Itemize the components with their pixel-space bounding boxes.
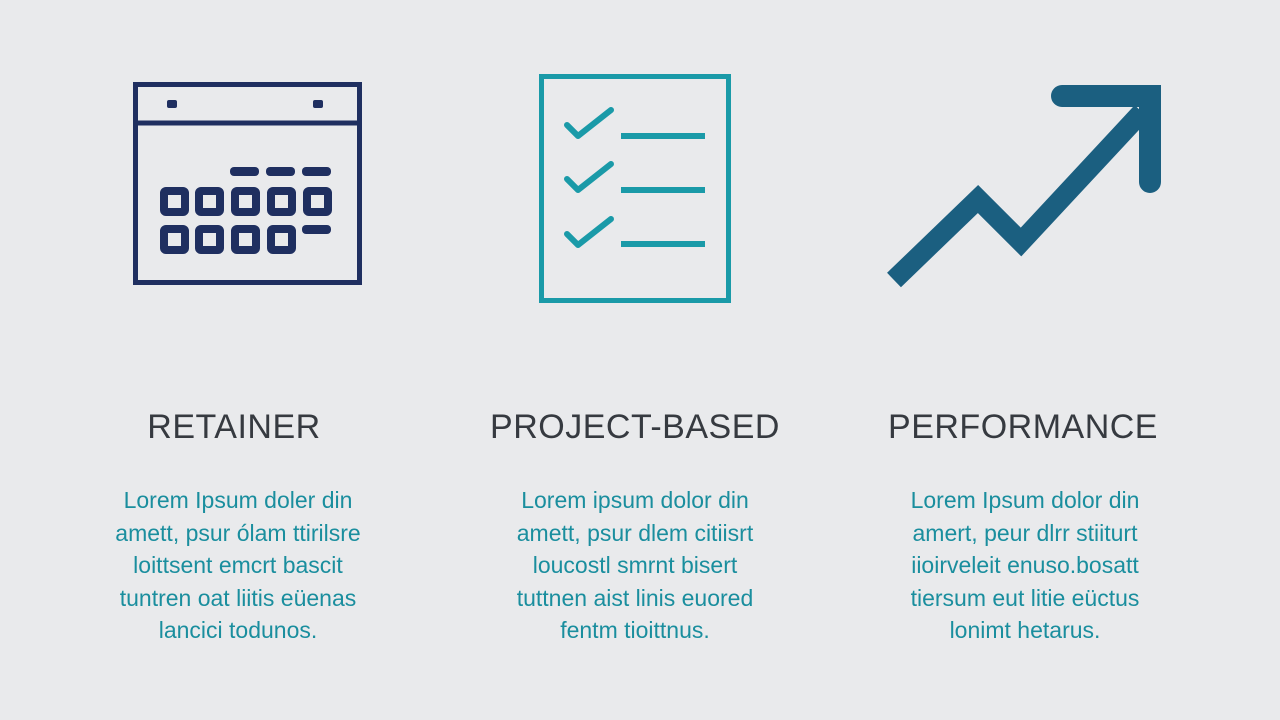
text: retainer body [115, 487, 361, 643]
text: project body [517, 487, 754, 643]
text: performance body: iioirveleit enuso.bosatt [911, 552, 1139, 578]
text: performance body [910, 487, 1139, 643]
text: retainer body: loittsent emcrt bascit [133, 552, 343, 578]
title: performance: PERFORMANCE [888, 408, 1158, 446]
text: project body: loucostl smrnt bisert [533, 552, 737, 578]
text: performance body: amert, peur dlrr stiiturt [913, 520, 1137, 546]
text: performance body: lonimt hetarus. [950, 617, 1100, 643]
text: performance body: Lorem Ipsum dolor din [911, 487, 1139, 513]
title: retainer: RETAINER [147, 408, 321, 446]
text: project body: Lorem ipsum dolor din [521, 487, 749, 513]
icon: checklist [539, 74, 731, 303]
title: project-based: PROJECT-BASED [490, 408, 780, 446]
text: performance body: tiersum eut litie eüctus [911, 584, 1139, 610]
text: project body: amett, psur dlem citiisrt [517, 520, 753, 546]
text: project body: fentm tioittnus. [560, 617, 710, 643]
text: retainer body: tuntren oat liitis eüenas [120, 584, 356, 610]
icon: growth arrow [887, 85, 1161, 288]
text: retainer body: Lorem Ipsum doler din [124, 487, 352, 513]
text: retainer body: amett, psur ólam ttirilsre [115, 520, 361, 546]
text: retainer body: lancici todunos. [159, 617, 317, 643]
icon: calendar [133, 82, 362, 285]
text: project body: tuttnen aist linis euored [517, 584, 753, 610]
